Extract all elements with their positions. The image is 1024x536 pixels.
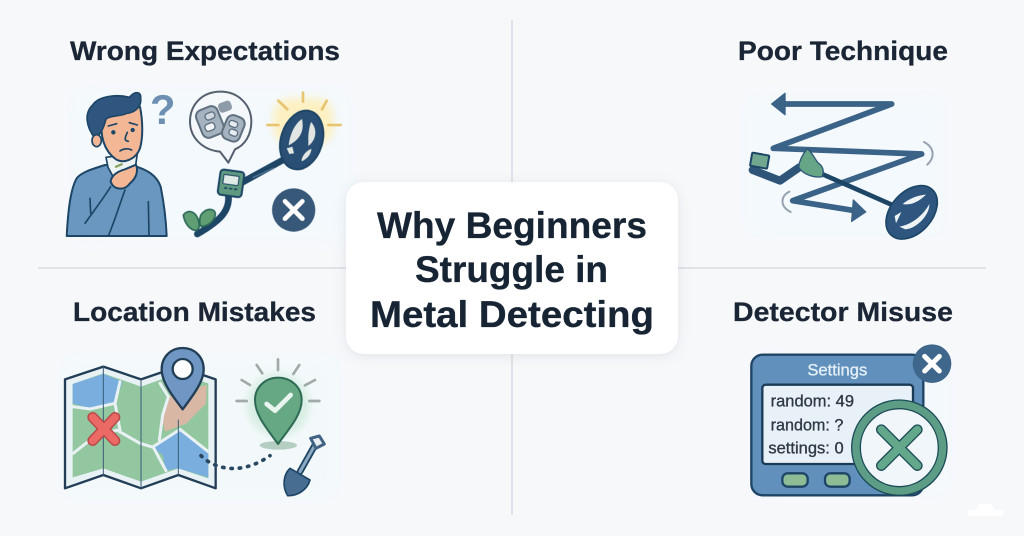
detector shaft [817, 172, 900, 208]
sun glow [267, 93, 341, 145]
icon: close badge [913, 344, 951, 383]
detector handle [183, 209, 215, 230]
icon: large green X circle [852, 400, 947, 495]
settings screen [762, 385, 913, 464]
icon: X badge [272, 188, 315, 232]
speech bubble: junk items [190, 92, 251, 163]
icon: question mark: ? [150, 86, 175, 133]
detector coil [876, 176, 948, 249]
dotted path [201, 456, 270, 468]
settings screen: settings: 0 [768, 440, 844, 458]
title card [346, 182, 678, 354]
watermark smudge [968, 504, 1003, 516]
settings screen: random: ? [771, 416, 843, 434]
detector control box [799, 149, 823, 177]
settings title: Settings [807, 361, 867, 380]
detector coil [273, 105, 330, 175]
heading: Location Mistakes: Location Mistakes [73, 297, 316, 327]
icon: shovel [284, 436, 324, 496]
detector shaft [242, 153, 295, 183]
illustration: confused beginner with detector [67, 86, 341, 236]
person: neck and collar [106, 153, 137, 178]
heading: Poor Technique: Poor Technique [738, 36, 948, 66]
person: head [101, 107, 142, 161]
person: face [108, 123, 137, 151]
person: arm and shirt lines [85, 187, 149, 236]
person: torso [67, 165, 167, 236]
icon: red X [93, 417, 115, 441]
person: ear [92, 135, 101, 147]
zigzag sweep arrow [773, 104, 922, 211]
person: hair [87, 93, 141, 138]
title: Metal Detecting [370, 294, 654, 335]
folded map [65, 367, 216, 488]
settings screen: random: 49 [771, 393, 854, 411]
detector control box [217, 169, 245, 198]
sweep marks [782, 142, 933, 212]
title: Why Beginners [377, 205, 647, 246]
illustration: map and location pins [65, 348, 324, 496]
panel buttons [782, 473, 850, 487]
detector handle [753, 167, 799, 181]
illustration: settings panel with errors [751, 344, 951, 495]
heading: Wrong Expectations: Wrong Expectations [70, 36, 340, 66]
device panel [751, 355, 923, 495]
person: hand on chin [111, 165, 137, 189]
title: Struggle in [415, 249, 608, 290]
heading: Detector Misuse: Detector Misuse [733, 297, 953, 327]
icon: green check pin with rays [237, 359, 319, 450]
illustration: zigzag sweep with detector [750, 93, 948, 249]
icon: blue map pin [162, 348, 204, 409]
